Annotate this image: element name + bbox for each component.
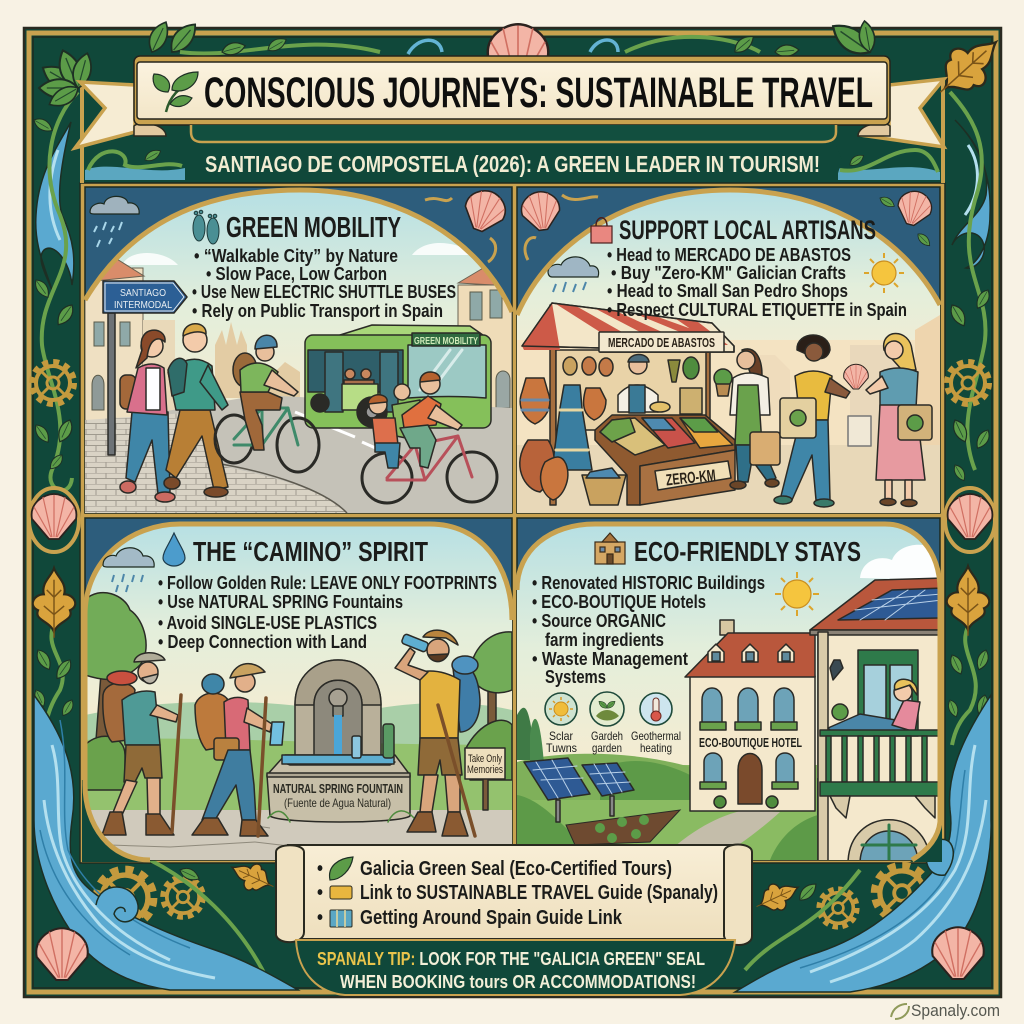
- resource list: [317, 857, 718, 929]
- heading: support local artisans: [591, 215, 876, 245]
- resource list: Getting Around Spain Guide Link: [360, 907, 623, 929]
- solar panels: [524, 758, 634, 822]
- bullet list: camino: • Follow Golden Rule: LEAVE ONLY FOOTPRINTS: [158, 573, 497, 593]
- man walking: [164, 324, 228, 497]
- icon: geothermal: [631, 693, 681, 755]
- shell ornaments: [519, 188, 935, 260]
- garden and hills: [517, 708, 818, 860]
- panel: eco-friendly stays: [517, 518, 945, 864]
- watermark: Spanaly.com: [911, 1001, 1000, 1020]
- natural spring fountain: NATURAL SPRING FOUNTAIN: [273, 781, 403, 796]
- border decoration: right vines and water: [925, 25, 1011, 745]
- icon: leaf sprig: [153, 72, 198, 112]
- sign: take only memories: Take Only: [468, 753, 502, 765]
- eco boutique hotel: [685, 620, 815, 811]
- heading: green mobility: GREEN MOBILITY: [226, 212, 401, 244]
- electric bus: [305, 325, 491, 428]
- distant cathedral: [215, 322, 300, 398]
- bullet list: artisans: [607, 245, 907, 320]
- resource list: Galicia Green Seal (Eco-Certified Tours): [360, 858, 672, 880]
- icon: geothermal: heating: [640, 741, 672, 755]
- street sign: SANTIAGO: [120, 288, 166, 299]
- title banner: [75, 56, 944, 148]
- bullet list: artisans: • Head to MERCADO DE ABASTOS: [607, 245, 851, 265]
- arch border: [517, 524, 940, 860]
- trees: [85, 593, 512, 790]
- bullet list: green mobility: • Rely on Public Transport in Spain: [192, 301, 443, 321]
- heading: camino spirit: [163, 533, 428, 567]
- panel: the camino spirit: [82, 518, 512, 862]
- heading: camino spirit: THE “CAMINO” SPIRIT: [193, 536, 428, 567]
- natural spring fountain: [267, 660, 414, 822]
- icon: garden: Gardeh: [591, 729, 623, 743]
- ground: [517, 445, 940, 513]
- bullet list: artisans: • Respect CULTURAL ETIQUETTE in Spain: [607, 300, 907, 320]
- buildings: [85, 260, 512, 420]
- eco feature icons: [545, 692, 681, 755]
- top corner swirls: [85, 32, 940, 180]
- sign: take only memories: [465, 748, 505, 810]
- icon: water drop: [163, 533, 185, 566]
- bullet list: camino: • Avoid SINGLE-USE PLASTICS: [158, 613, 377, 633]
- background buildings: [850, 315, 940, 445]
- arch border: [517, 190, 940, 315]
- lower corner fill: [910, 822, 942, 862]
- shell ornament: [459, 185, 511, 237]
- bullet list: eco stays: • Source ORGANIC: [532, 611, 666, 631]
- road and cobbles: [168, 396, 512, 513]
- woman with apron: [714, 349, 780, 489]
- bus sign: GREEN MOBILITY: [414, 336, 478, 347]
- sun: [775, 572, 819, 616]
- arch border: [85, 524, 512, 860]
- hiker drinking: [395, 630, 480, 836]
- top shell ornament: [488, 24, 548, 85]
- border decoration: bottom band with waves: [34, 695, 991, 992]
- bullet list: green mobility: [192, 246, 456, 321]
- bullet list: green mobility: • Slow Pace, Low Carbon: [206, 264, 387, 284]
- icon: hotel building: [595, 533, 625, 564]
- cyclist: [215, 335, 319, 472]
- bullet list: camino: • Use NATURAL SPRING Fountains: [158, 592, 403, 612]
- spanaly tip box: SPANALY TIP: LOOK FOR THE "GALICIA GREEN" SEAL: [317, 949, 705, 969]
- hanging goods: [563, 357, 577, 375]
- street sign: INTERMODAL: [114, 300, 172, 311]
- icon: scallop shell held: [844, 364, 868, 389]
- lower corner fill: [82, 780, 150, 862]
- arch border: [85, 190, 512, 312]
- cloud: [860, 544, 937, 579]
- bottom corner shells: [36, 927, 984, 980]
- subtitle strip: [184, 125, 842, 180]
- resource list: Link to SUSTAINABLE TRAVEL Guide (Spanaly): [360, 882, 718, 904]
- market stall: [522, 303, 734, 505]
- bullet list: artisans: • Buy "Zero-KM" Galician Crafts: [611, 263, 846, 283]
- icon: geothermal: Geothermal: [631, 729, 681, 743]
- bullet list: eco stays: Systems: [545, 667, 606, 687]
- hiker with red pack: [102, 653, 181, 835]
- panel: green mobility: [85, 185, 512, 513]
- terracotta pots: [520, 378, 626, 505]
- icon: solar: Sclar: [549, 729, 573, 743]
- bullet list: eco stays: • ECO-BOUTIQUE Hotels: [532, 592, 706, 612]
- spanaly tip box: WHEN BOOKING tours OR ACCOMMODATIONS!: [340, 972, 696, 992]
- border decoration: left vines and water: [32, 47, 95, 730]
- spanaly tip box: [296, 940, 735, 995]
- heading: support local artisans: SUPPORT LOCAL ARTISANS: [619, 215, 876, 245]
- sun: [864, 253, 904, 293]
- woman in yellow: [774, 335, 850, 507]
- bullet list: eco stays: farm ingredients: [545, 630, 664, 650]
- icon: spanaly logo: [891, 1004, 909, 1019]
- heading: eco-friendly stays: [595, 533, 861, 567]
- cloud and rain: [90, 196, 139, 247]
- side shell medallions: [29, 488, 995, 552]
- natural spring fountain: (Fuente de Agua Natural): [284, 796, 391, 810]
- heading: green mobility: [193, 210, 401, 244]
- icon: solar: [545, 693, 577, 755]
- sign: take only memories: Memories: [467, 764, 503, 776]
- bullet list: eco stays: • Waste Management: [532, 649, 688, 669]
- woman in pink dress: [866, 334, 932, 506]
- street sign: [103, 281, 187, 455]
- bullet list: camino: [158, 573, 497, 652]
- bullet list: eco stays: [532, 573, 765, 687]
- rain cloud: [103, 548, 154, 592]
- produce counter: [595, 415, 735, 505]
- icon: garden: garden: [592, 741, 622, 755]
- terrace building: [810, 578, 945, 864]
- resources scroll: [276, 844, 752, 945]
- heading: eco-friendly stays: ECO-FRIENDLY STAYS: [634, 536, 861, 567]
- icon: garden: [590, 692, 624, 755]
- bullet list: camino: • Deep Connection with Land: [158, 632, 367, 652]
- market stall: MERCADO DE ABASTOS: [608, 335, 715, 350]
- rain cloud: [548, 257, 599, 292]
- family on bicycle: [362, 372, 497, 503]
- bullet list: eco stays: • Renovated HISTORIC Buildings: [532, 573, 765, 593]
- resource list: •: [317, 907, 323, 929]
- eco boutique hotel: ECO-BOUTIQUE HOTEL: [699, 735, 802, 750]
- resource list: •: [317, 858, 323, 880]
- icon: solar: Tuwns: [546, 741, 577, 755]
- woman walking: [120, 330, 175, 502]
- hills: [88, 702, 512, 745]
- resource list: •: [317, 882, 323, 904]
- bullet list: artisans: • Head to Small San Pedro Shops: [607, 281, 848, 301]
- panel: support local artisans: [517, 187, 940, 513]
- vendor: [628, 362, 648, 375]
- stone path: [85, 810, 512, 860]
- hiker with orange hat: [192, 664, 284, 836]
- top leaves over frame: [145, 18, 877, 61]
- produce counter: ZERO-KM: [665, 467, 717, 489]
- small sign: [848, 416, 871, 446]
- bullet list: green mobility: • Use New ELECTRIC SHUTTLE BUSES: [192, 282, 456, 302]
- bullet list: green mobility: • “Walkable City” by Nature: [194, 246, 398, 266]
- subtitle: SANTIAGO DE COMPOSTELA (2026): A GREEN LEADER IN TOURISM!: [205, 151, 820, 177]
- icon: shopping bag: [591, 218, 612, 243]
- icon: footprints: [193, 210, 219, 244]
